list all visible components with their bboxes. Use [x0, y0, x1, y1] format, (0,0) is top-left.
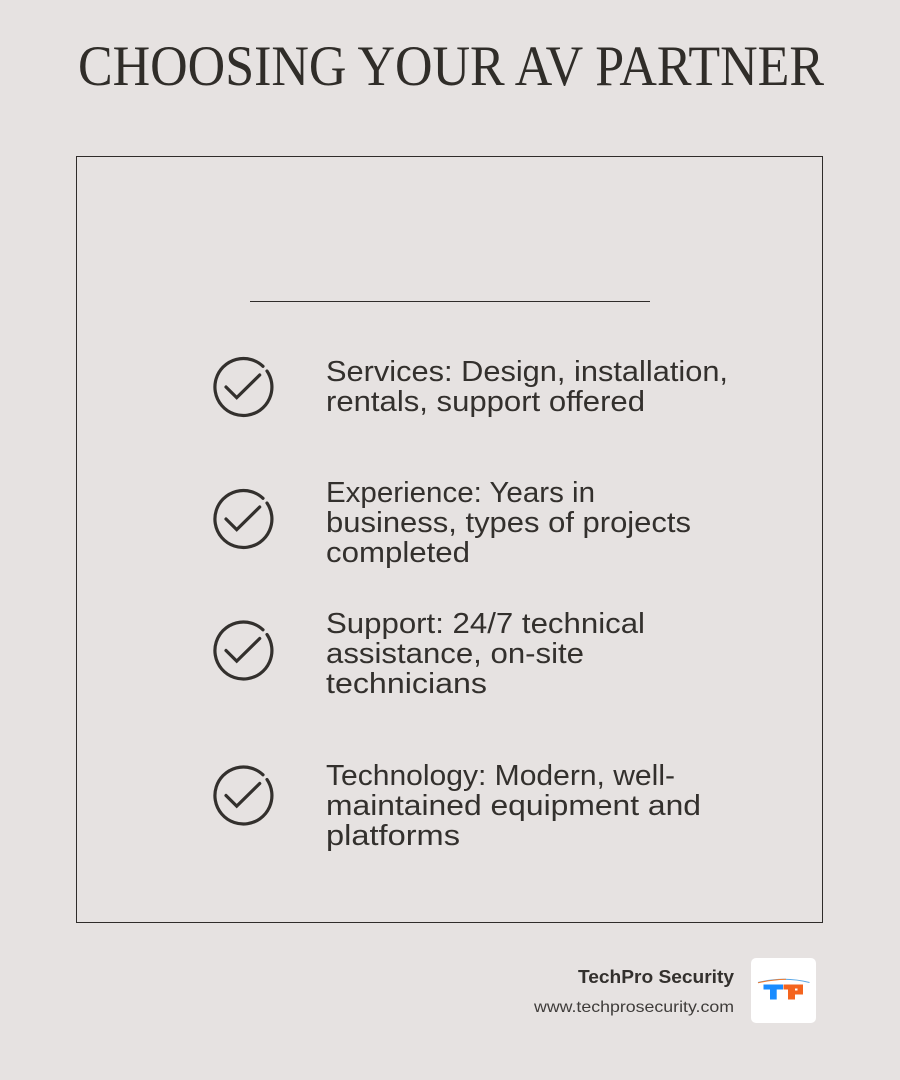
checklist item: experience: [215, 477, 691, 569]
text: experience: Experience: Years in: [326, 477, 595, 509]
text: technology: maintained equipment and: [326, 790, 701, 822]
icon: check circle: [215, 491, 272, 548]
brand name: TechPro Security: [578, 967, 734, 987]
text: support: assistance, on-site: [326, 638, 584, 670]
icon: check circle: [215, 359, 272, 416]
website: www.techprosecurity.com: [533, 999, 734, 1016]
text: services: [326, 356, 728, 418]
text: technology: Technology: Modern, well-: [326, 760, 675, 792]
icon: TechPro logo: [751, 958, 816, 1023]
checklist item: support: [215, 608, 645, 700]
icon: check circle: [215, 622, 272, 679]
text: experience: [326, 477, 691, 569]
text: support: Support: 24/7 technical: [326, 608, 645, 640]
text: technology: [326, 760, 701, 852]
text: support: technicians: [326, 668, 487, 700]
text: experience: business, types of projects: [326, 507, 691, 539]
checklist item: services: [215, 356, 728, 418]
text: experience: completed: [326, 537, 470, 569]
icon: check circle: [215, 767, 272, 824]
panel: checklist frame: [76, 156, 822, 922]
text: services: rentals, support offered: [326, 386, 645, 418]
checklist item: technology: [215, 760, 701, 852]
title: CHOOSING YOUR AV PARTNER: [78, 35, 824, 98]
text: technology: platforms: [326, 820, 460, 852]
text: support: [326, 608, 645, 700]
text: services: Services: Design, installation,: [326, 356, 728, 388]
